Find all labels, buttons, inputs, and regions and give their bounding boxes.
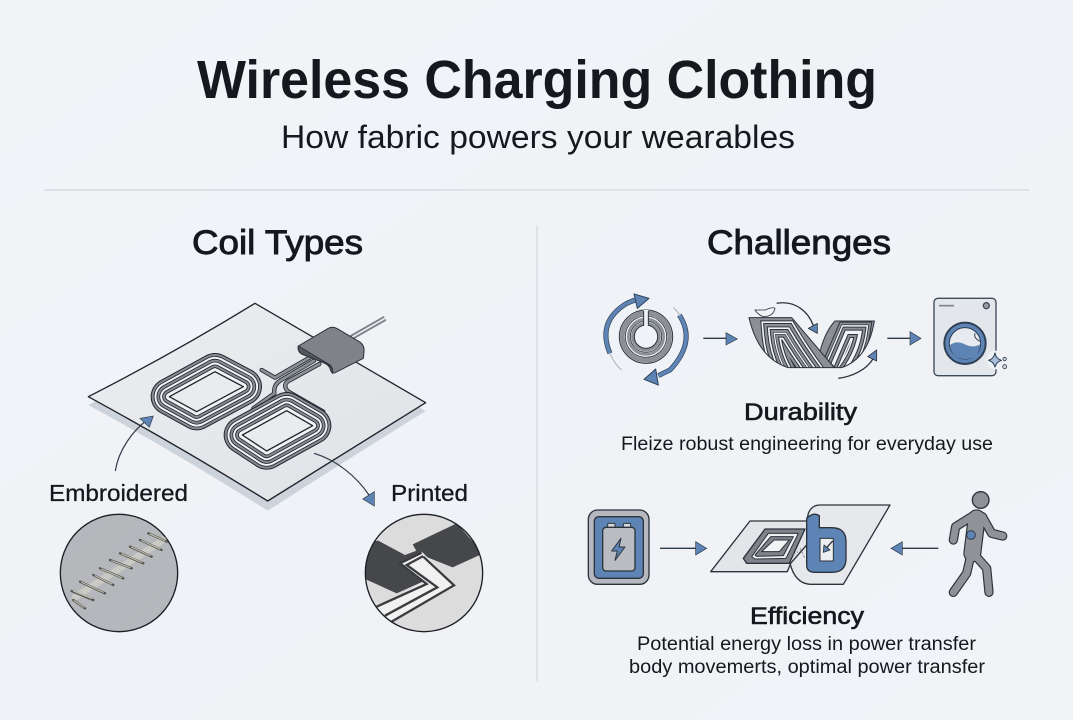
heading: efficiency: Efficiency — [750, 603, 864, 630]
heading: durability: Durability — [744, 399, 857, 426]
text: durability description: Fleize robust engineering for everyday use — [621, 434, 993, 455]
arrowheads on rotation arrows — [634, 294, 658, 385]
icon: folded coil — [745, 303, 878, 385]
efficiency process icons — [588, 492, 1003, 592]
heading: coil types: Coil Types — [192, 224, 363, 262]
icon: battery — [588, 510, 649, 584]
icon: washing machine — [934, 298, 1007, 376]
label: embroidered: Embroidered — [49, 480, 188, 506]
photo circle: embroidered stitch — [60, 514, 178, 632]
arrow — [891, 542, 938, 555]
connector box — [298, 327, 364, 373]
arrow: to embroidered — [115, 416, 153, 471]
stitches — [72, 533, 167, 608]
photo circle: printed trace — [360, 514, 483, 632]
text: efficiency line 2: body movemerts, optimal power transfer — [629, 657, 986, 678]
arrow — [887, 332, 921, 345]
text: efficiency line 1: Potential energy loss in power transfer — [637, 634, 977, 655]
illustration: fabric patch with two coils — [88, 303, 426, 511]
arrow: to printed — [314, 453, 374, 506]
cable — [350, 318, 385, 338]
arrow — [660, 542, 707, 555]
icon: walking person — [953, 492, 1003, 592]
fabric sheet — [88, 303, 426, 501]
title: Wireless Charging Clothing — [197, 50, 877, 110]
durability process icons — [606, 294, 1007, 385]
label: printed: Printed — [391, 480, 468, 506]
coil: left — [169, 372, 243, 412]
coil: right — [242, 411, 313, 451]
icon: fabric with coil and fold — [711, 505, 890, 584]
icon: circular coil with rotation arrows — [606, 300, 686, 376]
subtitle: How fabric powers your wearables — [281, 119, 795, 155]
arrow — [703, 333, 737, 345]
heading: challenges: Challenges — [707, 224, 891, 262]
coil traces — [253, 357, 323, 412]
